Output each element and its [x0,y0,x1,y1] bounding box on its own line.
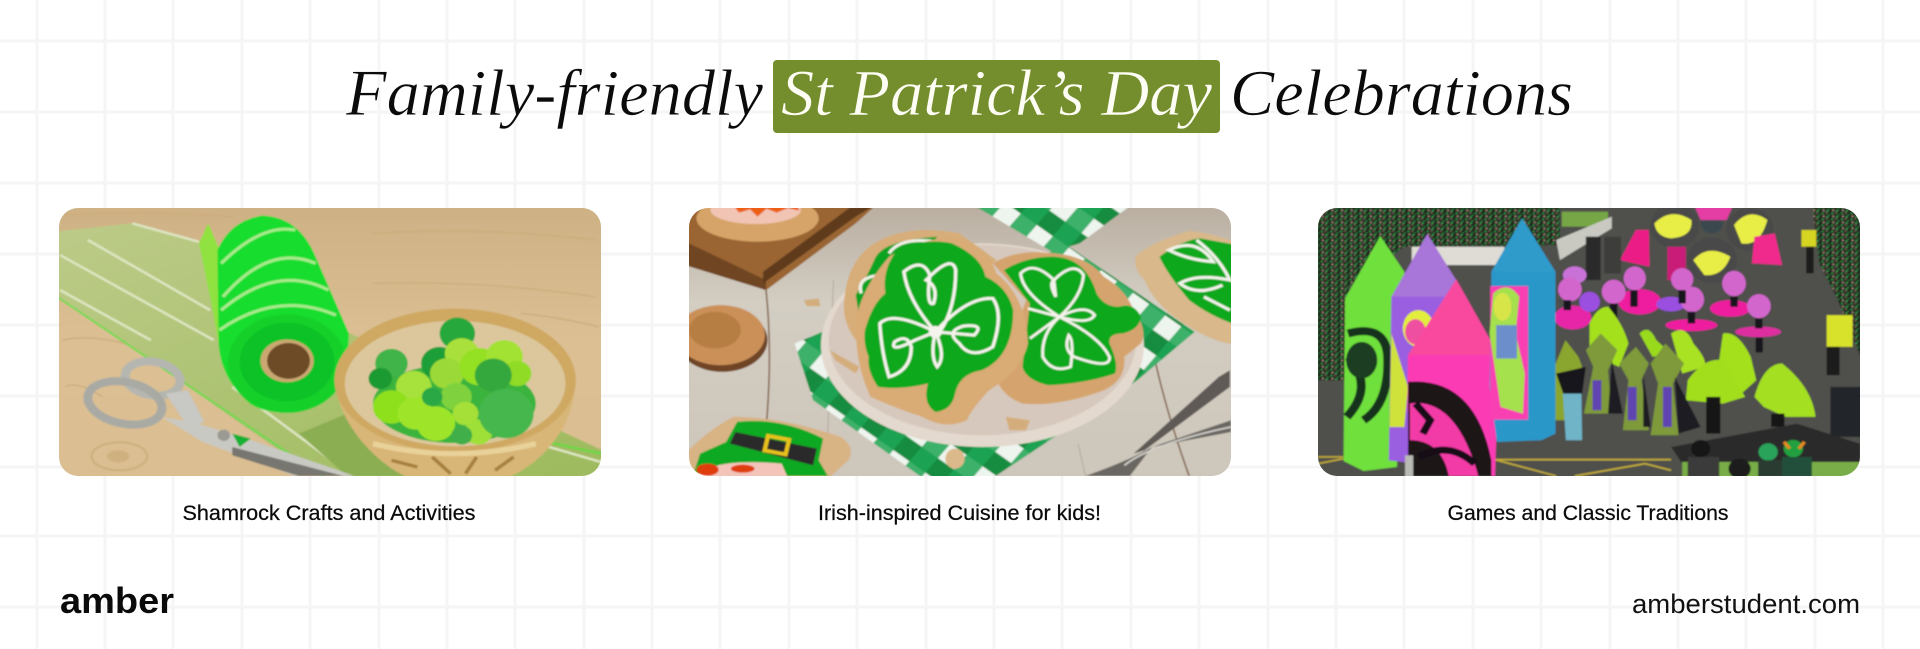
wooden spoon [676,305,767,372]
leprechaun hat cookie [685,417,850,480]
back shamrock cookie [843,230,996,360]
inflatable purple crayon [1388,234,1456,464]
barrier and spectators [1671,424,1860,479]
pink skirt dancers [1554,266,1781,353]
green creatures and cross costumes [1552,307,1815,440]
green mesh roll [199,216,349,413]
green gingham napkin [794,243,1194,480]
spoons [1085,370,1230,476]
caption: games: Games and Classic Traditions [1448,502,1728,525]
logo: amber: amber [60,580,174,621]
wooden board with cookie [685,195,877,290]
inflatable blue crayon [1489,218,1555,442]
mesh ribbon [55,223,606,480]
road markings [1318,457,1671,476]
crumbs [803,298,1029,430]
scissors [83,357,354,476]
caption: cuisine: Irish-inspired Cuisine for kids! [818,502,1101,525]
panel: shamrock cookies photo [689,208,1231,476]
inflatable green crayon [1343,236,1404,471]
top-right cookie [1135,231,1237,345]
crowd [1311,203,1867,437]
website url: amberstudent.com [1632,589,1860,619]
inflatable pink crayon [1407,279,1498,476]
panel: parade photo [1318,208,1860,476]
wicker basket with felt shamrocks [334,308,576,480]
title highlight box: St Patrick’s Day [781,57,1213,130]
right shamrock cookie [992,252,1143,404]
title: Family-friendly [345,57,764,130]
title [345,57,1573,133]
discs and poles [1585,203,1782,283]
main shamrock cookie [856,237,1027,425]
plate [820,243,1143,447]
top napkin [970,203,1133,252]
panel: shamrock crafts photo [59,208,601,476]
title: Celebrations [1230,57,1573,130]
caption: crafts: Shamrock Crafts and Activities [182,502,476,525]
